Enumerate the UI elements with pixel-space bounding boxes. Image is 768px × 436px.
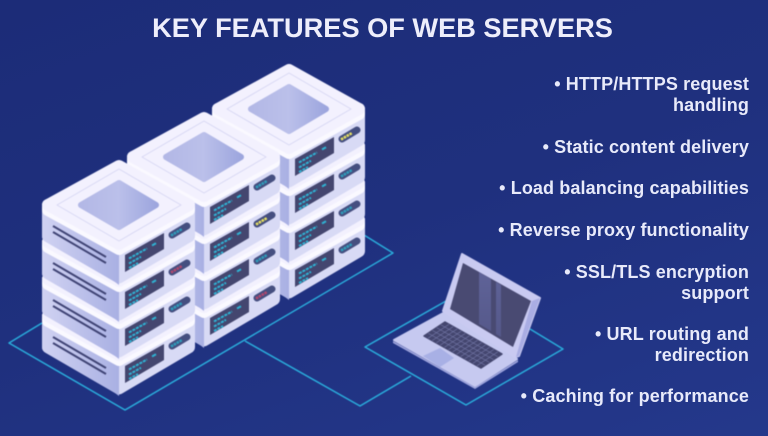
platform outline under laptop bbox=[365, 301, 563, 405]
feature: SSL/TLS encryption support: support bbox=[681, 283, 749, 303]
feature: reverse proxy: • Reverse proxy functionality bbox=[498, 220, 749, 240]
feature: HTTP/HTTPS request handling bbox=[554, 74, 749, 115]
feature: load balancing: • Load balancing capabilities bbox=[499, 178, 749, 198]
laptop touchpad bbox=[423, 348, 454, 367]
laptop base bbox=[394, 311, 517, 386]
screen reflections bbox=[479, 272, 501, 337]
laptop screen bbox=[450, 263, 531, 347]
feature: static content delivery: • Static content delivery bbox=[543, 137, 749, 157]
feature: caching for performance: • Caching for performance bbox=[521, 386, 749, 406]
title: KEY FEATURES OF WEB SERVERS bbox=[152, 12, 613, 43]
feature: HTTP/HTTPS request handling: • HTTP/HTTPS request bbox=[554, 74, 749, 94]
server stack: middle bbox=[127, 118, 280, 348]
feature: URL routing and redirection: • URL routing and bbox=[595, 324, 749, 344]
server stack: front bbox=[42, 166, 195, 396]
laptop keyboard bbox=[424, 322, 502, 368]
server stack: back bbox=[212, 70, 365, 300]
connector line between server platform and laptop platform bbox=[245, 341, 411, 406]
feature: URL routing and redirection bbox=[595, 324, 749, 365]
feature: HTTP/HTTPS request handling: handling bbox=[673, 95, 749, 115]
laptop lid bbox=[443, 254, 540, 357]
feature: SSL/TLS encryption support: • SSL/TLS encryption bbox=[564, 262, 749, 282]
platform outline under servers bbox=[9, 235, 393, 410]
icon: laptop bbox=[393, 254, 540, 389]
feature: URL routing and redirection: redirection bbox=[655, 345, 749, 365]
feature: SSL/TLS encryption support bbox=[564, 262, 749, 303]
